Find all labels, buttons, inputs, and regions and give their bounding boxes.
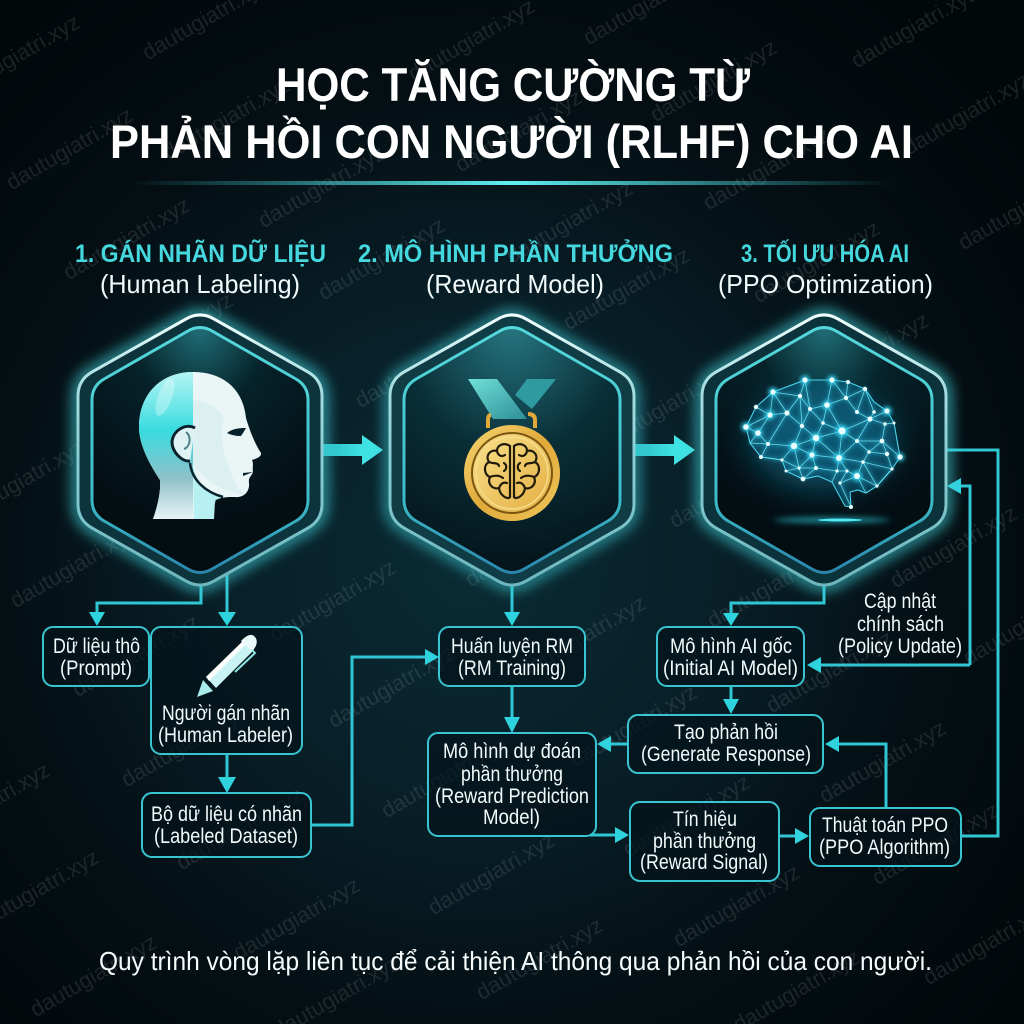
watermark pattern: dautugiatri.xyz: [646, 34, 781, 127]
watermark pattern: dautugiatri.xyz: [265, 554, 400, 647]
heading: step 1: (Human Labeling): [100, 269, 300, 299]
icon: gold medal with brain: [464, 379, 560, 521]
watermark pattern: dautugiatri.xyz: [102, 287, 237, 380]
watermark pattern: dautugiatri.xyz: [619, 769, 754, 862]
watermark pattern: dautugiatri.xyz: [2, 102, 137, 195]
box: PPO algorithm: (PPO Algorithm): [819, 836, 950, 859]
heading: step 3: 3. TỐI ƯU HÓA AI: [741, 238, 909, 268]
box: reward signal: phần thưởng: [653, 830, 756, 853]
box: reward prediction model: [428, 733, 596, 836]
arrow: step 2 to step 3: [633, 435, 695, 465]
watermark pattern: dautugiatri.xyz: [314, 212, 449, 305]
label: policy update: [838, 590, 962, 658]
watermark pattern: dautugiatri.xyz: [669, 859, 804, 952]
panel: hexagon PPO optimization: [702, 315, 946, 585]
box: labeled dataset: [142, 793, 311, 857]
title: HỌC TĂNG CƯỜNG TỪ: [276, 58, 750, 111]
box: reward signal: [630, 802, 779, 881]
watermark pattern: dautugiatri.xyz: [172, 782, 307, 875]
box: human labeler: [151, 627, 302, 754]
watermark pattern: dautugiatri.xyz: [868, 797, 1003, 890]
watermark pattern: dautugiatri.xyz: [566, 679, 701, 772]
box: PPO algorithm: Thuật toán PPO: [822, 814, 948, 837]
box: reward prediction model: Model): [483, 806, 540, 829]
label: policy update: chính sách: [857, 613, 944, 636]
box: RM training: Huấn luyện RM: [451, 635, 573, 658]
box: RM training: [439, 627, 585, 686]
heading: step 1: 1. GÁN NHÃN DỮ LIỆU: [75, 238, 326, 268]
watermark pattern: dautugiatri.xyz: [6, 520, 141, 613]
box: initial AI model: (Initial AI Model): [663, 657, 798, 680]
icon: pen: [197, 635, 257, 697]
watermark pattern: dautugiatri.xyz: [502, 175, 637, 268]
heading: step 2: 2. MÔ HÌNH PHẦN THƯỞNG: [358, 238, 673, 268]
watermark pattern: dautugiatri.xyz: [665, 440, 800, 533]
watermark pattern: dautugiatri.xyz: [472, 912, 607, 1005]
box: human labeler: Người gán nhãn: [162, 702, 290, 725]
watermark pattern: dautugiatri.xyz: [451, 84, 586, 177]
watermark pattern: dautugiatri.xyz: [749, 215, 884, 308]
watermark pattern: dautugiatri.xyz: [324, 640, 459, 733]
title: [110, 58, 913, 168]
box: reward prediction model: phần thưởng: [461, 763, 563, 786]
watermark pattern: dautugiatri.xyz: [815, 715, 950, 808]
title: PHẢN HỒI CON NGƯỜI (RLHF) CHO AI: [110, 115, 913, 168]
box: generate response: (Generate Response): [641, 743, 811, 766]
box: generate response: Tạo phản hồi: [674, 721, 778, 744]
box: reward prediction model: (Reward Prediction: [435, 785, 589, 808]
heading: step 2: [358, 238, 673, 299]
watermark pattern: dautugiatri.xyz: [703, 540, 838, 633]
watermark pattern: dautugiatri.xyz: [598, 360, 733, 453]
watermark pattern: dautugiatri.xyz: [424, 827, 559, 920]
icon: neural network brain: [742, 376, 904, 523]
heading: step 3: (PPO Optimization): [718, 269, 933, 299]
label: policy update: Cập nhật: [864, 590, 936, 613]
connectors between boxes: [89, 450, 998, 844]
watermark pattern: dautugiatri.xyz: [26, 929, 161, 1022]
footer caption: Quy trình vòng lặp liên tục để cải thiện AI thông qua phản hồi của con người.: [99, 946, 932, 976]
box: raw data prompt: [43, 627, 149, 686]
box: PPO algorithm: [810, 808, 961, 866]
watermark pattern: dautugiatri.xyz: [461, 499, 596, 592]
label: policy update: (Policy Update): [838, 635, 962, 658]
box: RM training: (RM Training): [458, 657, 566, 680]
box: initial AI model: Mô hình AI gốc: [670, 635, 792, 658]
watermark pattern: dautugiatri.xyz: [798, 307, 933, 400]
watermark pattern: dautugiatri.xyz: [377, 730, 512, 823]
panel: hexagon human labeling: [78, 315, 322, 585]
arrow: step 1 to step 2: [321, 435, 383, 465]
watermark pattern: dautugiatri.xyz: [159, 72, 294, 165]
heading: step 3: [718, 238, 933, 299]
watermark pattern: dautugiatri.xyz: [229, 872, 364, 965]
heading: step 1: [75, 238, 326, 299]
watermark pattern: dautugiatri.xyz: [515, 590, 650, 683]
box: reward signal: Tín hiệu: [673, 808, 737, 831]
box: raw data prompt: (Prompt): [60, 657, 132, 680]
box: reward signal: (Reward Signal): [640, 851, 768, 874]
watermark pattern: dautugiatri.xyz: [699, 122, 834, 215]
icon: human head profile: [139, 372, 261, 519]
box: labeled dataset: (Labeled Dataset): [154, 825, 298, 848]
watermark pattern: dautugiatri.xyz: [117, 699, 252, 792]
box: raw data prompt: Dữ liệu thô: [53, 635, 140, 658]
watermark pattern: dautugiatri.xyz: [762, 625, 897, 718]
box: initial AI model: [657, 627, 804, 686]
panel: hexagon reward model: [390, 315, 634, 585]
watermark pattern: dautugiatri.xyz: [68, 609, 203, 702]
box: reward prediction model: Mô hình dự đoán: [443, 740, 581, 763]
watermark pattern: dautugiatri.xyz: [886, 500, 1021, 593]
watermark pattern: dautugiatri.xyz: [351, 320, 486, 413]
box: generate response: [628, 715, 823, 773]
box: labeled dataset: Bộ dữ liệu có nhãn: [151, 803, 302, 826]
watermark pattern: dautugiatri.xyz: [59, 192, 194, 285]
watermark pattern: dautugiatri.xyz: [254, 140, 389, 233]
watermark pattern: dautugiatri.xyz: [559, 242, 694, 335]
heading: step 2: (Reward Model): [426, 269, 604, 299]
box: human labeler: (Human Labeler): [158, 724, 293, 747]
